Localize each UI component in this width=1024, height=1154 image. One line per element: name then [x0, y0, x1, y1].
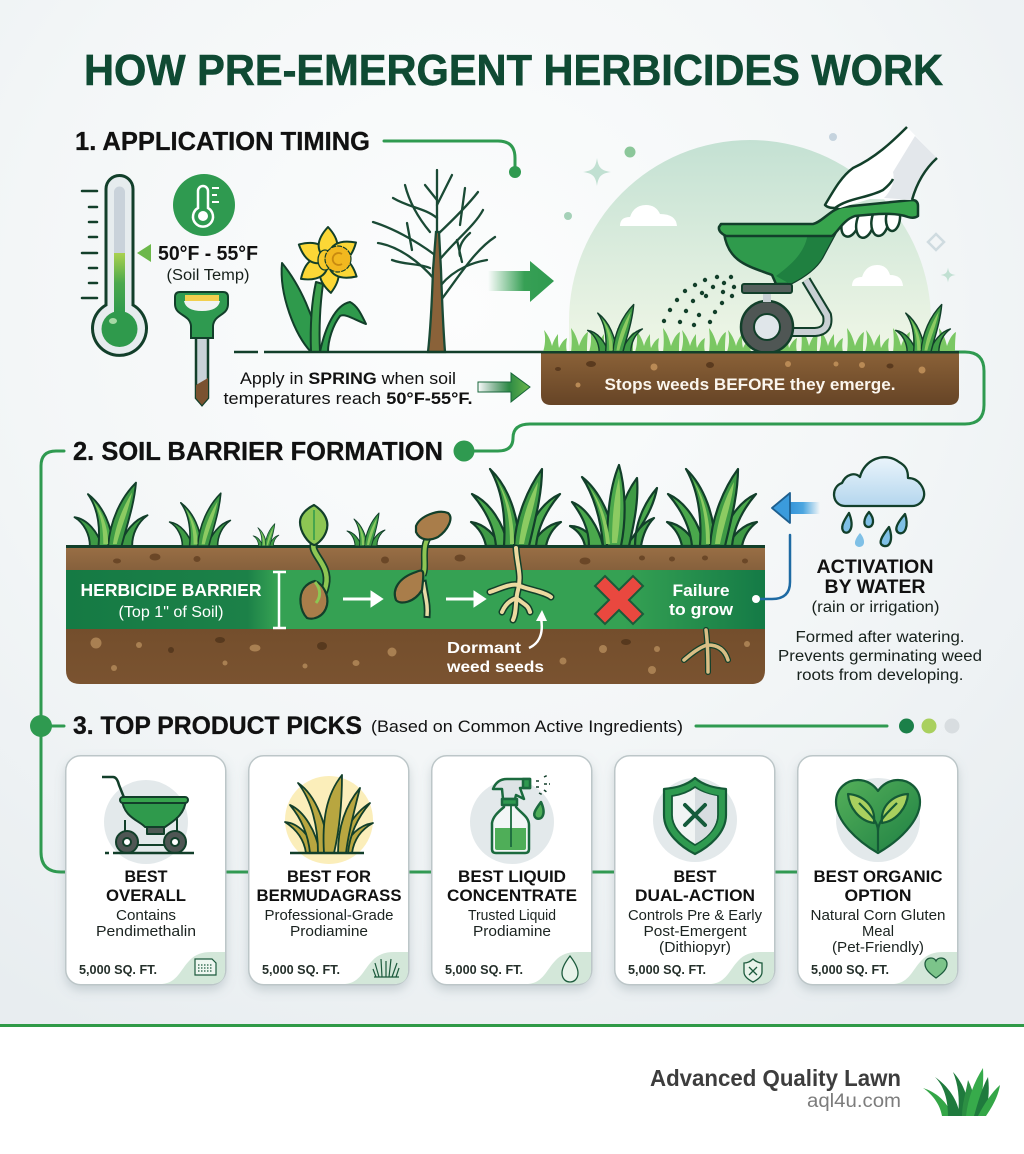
icon: calendar [195, 959, 216, 975]
herbicide barrier label: HERBICIDE BARRIER [80, 580, 262, 600]
label: dormant weed seeds: weed seeds [446, 659, 544, 676]
section 2 heading: 2. SOIL BARRIER FORMATION [73, 436, 443, 466]
timing instruction text line 2: temperatures reach 50°F-55°F. [224, 389, 472, 408]
panel: spreader scene [543, 127, 956, 353]
activation by water text: ACTIVATION [816, 557, 934, 578]
card title: BEST FOR [287, 867, 371, 886]
card: best organic option [798, 756, 958, 985]
card title line 2: BERMUDAGRASS [256, 886, 402, 905]
seedling stage 2 [395, 512, 450, 618]
coverage label: 5,000 SQ. FT. [811, 962, 889, 977]
card: best liquid concentrate [432, 756, 592, 985]
background grass [543, 328, 956, 352]
card description line 2: Meal [862, 924, 894, 940]
activation by water text: BY WATER [824, 577, 926, 598]
roots of emerging weed [490, 548, 551, 620]
icon: green thermometer badge [173, 174, 235, 236]
icon: daffodil [282, 227, 366, 352]
card: best overall [66, 756, 226, 985]
temperature label: 50°F - 55°F [158, 243, 258, 265]
icon: rain cloud [834, 457, 924, 547]
blue connector from barrier to water arrow [752, 535, 790, 603]
footer logo: grass [923, 1068, 1000, 1116]
card title line 2: CONCENTRATE [447, 886, 577, 905]
section 1 heading [75, 126, 521, 178]
arrow: water to soil [772, 493, 820, 523]
icon: spreader [102, 777, 194, 864]
panel: soil cross-section [66, 545, 765, 684]
card description: Controls Pre & Early [628, 908, 763, 924]
seedling stage 1 [300, 505, 327, 619]
card description: Contains [116, 908, 176, 924]
activation by water text: Prevents germinating weed [778, 648, 982, 665]
icon: small drop [562, 956, 578, 982]
coverage label: 5,000 SQ. FT. [79, 962, 157, 977]
timing instruction text: Apply in SPRING when soil [240, 369, 456, 388]
ground line [234, 351, 545, 353]
gloved hand [825, 127, 937, 208]
footer brand text [650, 1065, 901, 1112]
icon: thermometer [82, 176, 151, 355]
icon: shield [653, 778, 737, 862]
temperature label [158, 243, 258, 284]
footer divider [0, 1024, 1024, 1027]
label: failure to grow [669, 582, 733, 619]
gloved fingers [838, 204, 901, 239]
arrow: timing to spreader [488, 261, 554, 302]
label: failure to grow: Failure [672, 582, 730, 600]
panel: soil strip [541, 351, 959, 405]
activation by water text [778, 557, 982, 684]
arrow: instruction to soil [478, 373, 530, 402]
section 3 heading [30, 712, 960, 740]
card title line 2: DUAL-ACTION [635, 886, 755, 905]
card description line 3: (Dithiopyr) [659, 940, 731, 956]
icon: small heart [925, 958, 947, 978]
section 3 heading: 3. TOP PRODUCT PICKS [73, 712, 362, 740]
card description line 2: Pendimethalin [96, 924, 196, 940]
card description: Natural Corn Gluten [810, 908, 946, 924]
coverage label: 5,000 SQ. FT. [628, 962, 706, 977]
card description line 2: Prodiamine [473, 924, 551, 940]
spreader [719, 200, 918, 353]
label: dormant weed seeds: Dormant [447, 640, 522, 657]
seed dots [662, 275, 736, 327]
activation by water text: Formed after watering. [796, 629, 964, 646]
card title line 2: OVERALL [106, 886, 186, 905]
stunted roots [684, 630, 728, 672]
card title: BEST ORGANIC [814, 867, 942, 886]
icon: red X [595, 576, 643, 624]
footer brand text: Advanced Quality Lawn [650, 1065, 901, 1091]
icon: bare tree [373, 170, 495, 352]
sky decoration [564, 133, 956, 286]
herbicide barrier label [80, 572, 286, 628]
arrow: stage 1 to 2 [343, 593, 381, 605]
label: dormant weed seeds [446, 610, 547, 676]
card description: Professional-Grade [264, 908, 394, 924]
card title: BEST [124, 867, 168, 886]
card: best dual-action [615, 756, 775, 985]
icon: spray bottle [470, 775, 554, 864]
soil strip caption: Stops weeds BEFORE they emerge. [604, 375, 896, 394]
activation by water text: roots from developing. [796, 667, 964, 684]
icon: small grass [373, 959, 399, 977]
title: HOW PRE-EMERGENT HERBICIDES WORK [84, 46, 943, 95]
section 3 heading: (Based on Common Active Ingredients) [371, 718, 683, 736]
herbicide barrier label: (Top 1" of Soil) [118, 604, 224, 621]
card description: Trusted Liquid [468, 908, 556, 924]
card description line 2: Post-Emergent [644, 924, 746, 940]
card description line 2: Prodiamine [290, 924, 368, 940]
icon: soil probe [175, 292, 228, 405]
grass tufts on soil [75, 465, 757, 546]
card title: BEST LIQUID [458, 867, 566, 886]
icon: small shield [744, 959, 762, 982]
icon: bermudagrass [285, 775, 373, 864]
icon: heart with leaves [836, 778, 920, 862]
card title line 2: OPTION [844, 886, 912, 905]
card description line 3: (Pet-Friendly) [832, 940, 924, 956]
coverage label: 5,000 SQ. FT. [445, 962, 523, 977]
temperature label: (Soil Temp) [166, 267, 250, 284]
section 1 heading: 1. APPLICATION TIMING [75, 126, 370, 156]
arrow: stage 2 to 3 [446, 593, 484, 605]
activation by water text: (rain or irrigation) [812, 599, 940, 616]
footer brand text: aql4u.com [807, 1091, 901, 1112]
connector lines between sections [41, 141, 984, 872]
coverage label: 5,000 SQ. FT. [262, 962, 340, 977]
large grass tufts [588, 304, 950, 352]
label: failure to grow: to grow [669, 601, 733, 619]
card: best for bermudagrass [249, 756, 409, 985]
card title: BEST [674, 867, 717, 886]
